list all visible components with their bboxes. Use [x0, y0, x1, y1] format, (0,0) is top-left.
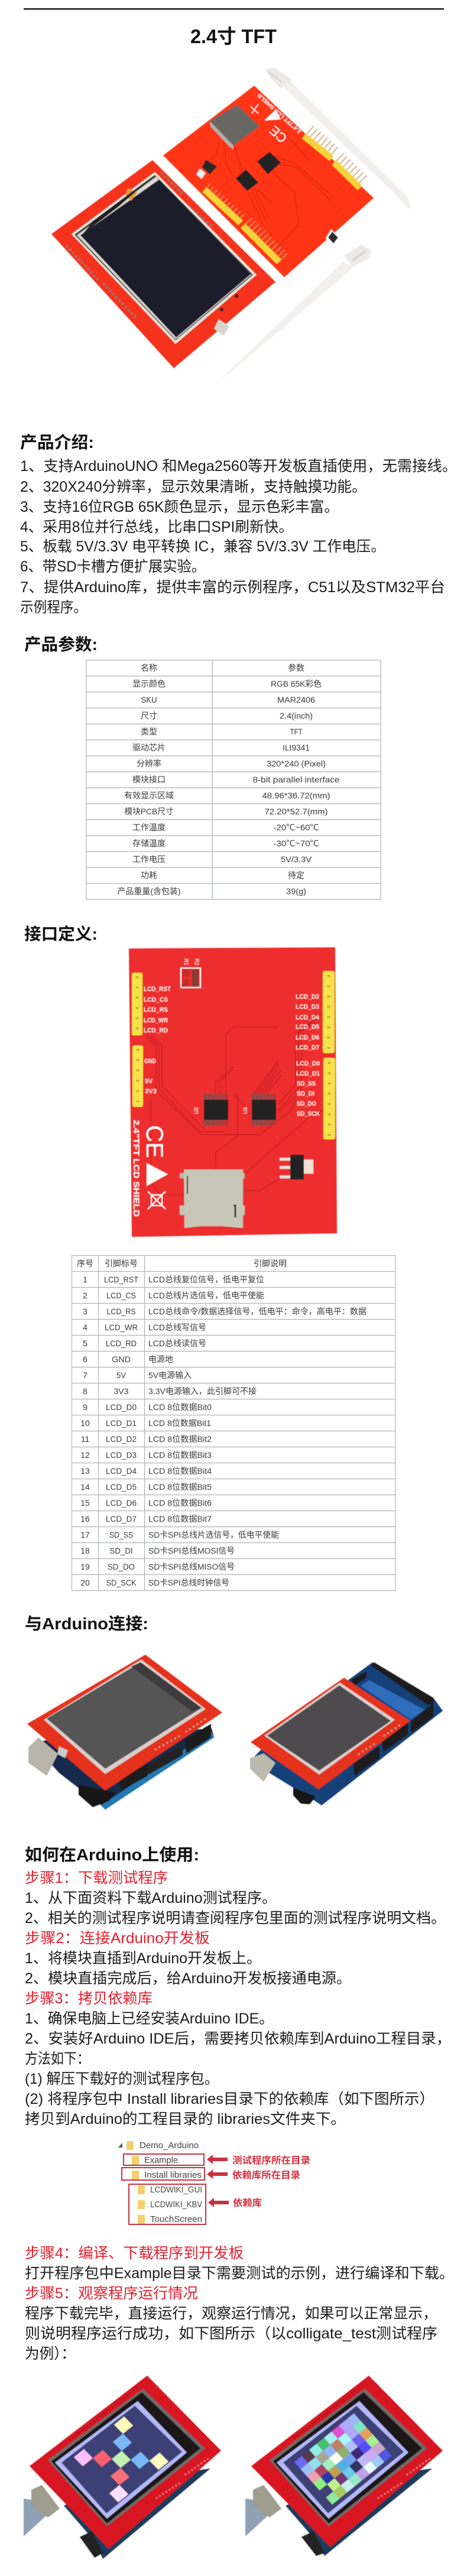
- product intro list: 2、320X240分辨率，显示效果清晰，支持触摸功能。: [20, 479, 367, 495]
- parameter table: 产品重量(含包装): [117, 886, 181, 896]
- pin table: 16: [80, 1514, 90, 1523]
- pin table: LCD 8位数据Bit0: [148, 1402, 212, 1412]
- power jack: [79, 1785, 115, 1807]
- parameter table: 8-bit parallel interface: [253, 775, 340, 784]
- steps 4 and 5: 步骤5：观察程序运行情况: [25, 2285, 198, 2302]
- pin header J3: [132, 973, 142, 1035]
- right pin labels: LCD_D3: [296, 1003, 319, 1011]
- usb cable: [245, 2499, 268, 2536]
- steps 1 to 3: 1、将模块直插到Arduino开发板上。: [25, 1950, 261, 1967]
- pin table: LCD_D6: [106, 1498, 137, 1508]
- pin table: LCD 8位数据Bit4: [148, 1466, 212, 1476]
- traces: [145, 1013, 324, 1195]
- pin header J1: [323, 1058, 335, 1139]
- folder names: Demo_Arduino: [140, 2140, 199, 2151]
- lavender screen edge: [277, 2401, 408, 2519]
- pin table: SD卡SPI总线MOSI信号: [148, 1546, 235, 1555]
- left pin labels: GND: [144, 1058, 156, 1065]
- pin solder dots: [137, 975, 329, 1139]
- pin table: LCD总线命令/数据选择信号，低电平：命令，高电平：数据: [148, 1307, 367, 1316]
- IC U2: [193, 1097, 228, 1123]
- parameter table: 48.96*36.72(mm): [262, 791, 330, 800]
- right pin labels: LCD_D1: [296, 1070, 320, 1077]
- edge holes: [294, 2386, 430, 2498]
- black top edge of panel: [131, 1662, 202, 1711]
- pin table: LCD 8位数据Bit2: [148, 1434, 212, 1444]
- frame: [48, 2389, 205, 2526]
- left pin labels: LCD_RST: [144, 986, 171, 993]
- pin table: 15: [80, 1498, 90, 1508]
- pin table: 1: [83, 1275, 87, 1284]
- black film strip: [83, 175, 155, 234]
- IC U3: U3: [242, 1107, 248, 1114]
- folder tree diagram: 依赖库: [233, 2197, 262, 2208]
- right pin labels: SD_DO: [297, 1100, 316, 1107]
- pin table: 8: [83, 1386, 87, 1396]
- pin table: LCD总线片选信号，低电平使能: [148, 1291, 264, 1300]
- regulator: [202, 160, 217, 174]
- pin table: SD_SS: [109, 1530, 133, 1539]
- pin table: LCD 8位数据Bit5: [148, 1482, 212, 1492]
- pin table: LCD_RST: [104, 1275, 138, 1284]
- pin table: 14: [80, 1482, 90, 1492]
- parameter table: 39(g): [286, 886, 306, 896]
- black panel: [51, 2392, 200, 2523]
- header holes: [67, 174, 213, 317]
- pin table: LCD总线读信号: [148, 1339, 206, 1348]
- bin mark: [251, 104, 258, 113]
- pin table: LCD 8位数据Bit7: [148, 1514, 212, 1523]
- right pin labels: LCD_D4: [296, 1014, 320, 1021]
- top rule: [24, 8, 444, 9]
- pin table: LCD_D4: [106, 1466, 137, 1476]
- arrows: [207, 2155, 229, 2207]
- resistors R1 R2: [181, 959, 200, 987]
- pin table: 5V电源输入: [148, 1370, 192, 1380]
- pin table: SD卡SPI总线时钟信号: [148, 1578, 229, 1587]
- pin table: 10: [80, 1418, 90, 1428]
- right pin labels: LCD_D6: [296, 1034, 319, 1041]
- folder tree diagram: LCDWIKI_KBV: [150, 2200, 202, 2210]
- steps 1 to 3: 步骤3：拷贝依赖库: [25, 1990, 153, 2007]
- screen: [61, 2406, 182, 2513]
- folder tree diagram: LCDWIKI_GUI: [150, 2185, 202, 2195]
- product intro list: [20, 458, 457, 616]
- left pin labels: LCD_RD: [144, 1027, 168, 1034]
- pin header J2: [323, 971, 335, 1053]
- screen: [47, 1662, 202, 1769]
- pin table: LCD 8位数据Bit6: [148, 1498, 212, 1508]
- pin table: 引脚标号: [105, 1259, 138, 1268]
- steps 1 to 3: (2) 将程序包中 Install libraries目录下的依赖库（如下图所示）: [25, 2091, 434, 2107]
- steps 1 to 3: 步骤1：下载测试程序: [25, 1870, 168, 1886]
- trace fans: [216, 1061, 281, 1093]
- SD card slot: [210, 105, 260, 145]
- product intro list: 4、采用8位并行总线，比串口SPI刷新快。: [20, 519, 293, 535]
- usb port: [250, 1753, 275, 1782]
- frame: [270, 2389, 427, 2526]
- pin table: LCD_RD: [106, 1339, 137, 1348]
- steps 1 to 3: 2、模块直插完成后，给Arduino开发板接通电源。: [25, 1970, 351, 1987]
- back board: [163, 86, 374, 277]
- folder tree diagram: TouchScreen: [150, 2214, 202, 2224]
- usb connector: [31, 2485, 60, 2517]
- highlight boxes: [122, 2154, 206, 2224]
- right pin labels: SD_DI: [297, 1090, 314, 1097]
- red shield: [251, 1678, 410, 1789]
- pin table: 3: [83, 1307, 87, 1316]
- navy pcb: [64, 2468, 210, 2559]
- parameter table: 工作电压: [132, 855, 166, 864]
- parameter table: MAR2406: [277, 695, 315, 704]
- pin table: LCD_D5: [106, 1482, 137, 1492]
- colored diamonds: [74, 2416, 168, 2502]
- left pin labels: 5V: [145, 1078, 153, 1085]
- edge holes: [73, 2386, 209, 2498]
- folder tree diagram: 依赖库所在目录: [232, 2169, 300, 2181]
- tact button: [214, 319, 229, 336]
- steps 1 to 3: 1、确保电脑上已经安装Arduino IDE。: [25, 2010, 274, 2027]
- pin table: SD_SCK: [106, 1578, 137, 1587]
- steps 1 to 3: 2、安装好Arduino IDE后，需要拷贝依赖库到Arduino工程目录，: [25, 2031, 451, 2047]
- hero photo: two shield boards and styluses: [51, 67, 411, 387]
- steps 1 to 3: [25, 1870, 451, 2127]
- stylus bottom: [212, 245, 371, 387]
- pin table: 18: [80, 1546, 90, 1555]
- pin table: 序号: [77, 1259, 93, 1268]
- screen: [283, 2406, 404, 2513]
- pin table: GND: [112, 1354, 131, 1364]
- photo: shield on Arduino Mega: [250, 1662, 443, 1805]
- right pin labels: LCD_D5: [296, 1024, 319, 1031]
- parameter table: ILI9341: [283, 743, 310, 752]
- lavender screen edge: [55, 2401, 187, 2519]
- product intro list: 5、板载 5V/3.3V 电平转换 IC，兼容 5V/3.3V 工作电压。: [20, 538, 385, 555]
- board back photo with pin labels: [129, 947, 337, 1237]
- heading: product intro: 产品介绍:: [20, 433, 94, 451]
- pin table: LCD总线写信号: [148, 1323, 206, 1332]
- folder rows: [118, 2141, 145, 2224]
- uno pcb: [33, 1729, 214, 1810]
- header holes: [155, 1717, 209, 1749]
- black headers: [371, 1662, 433, 1705]
- mini connector area: [118, 1764, 148, 1791]
- pin table: 11: [81, 1434, 89, 1444]
- button: [57, 1746, 68, 1758]
- pin table: LCD 8位数据Bit1: [148, 1418, 211, 1428]
- CE mark: CE: [267, 123, 290, 146]
- pin table: SD_DO: [108, 1562, 135, 1571]
- parameter table: 2.4(inch): [280, 711, 313, 720]
- black jack: [301, 2531, 325, 2556]
- pin table: 19: [80, 1562, 90, 1571]
- mega pcb: [250, 1662, 443, 1805]
- heading: how to use: 如何在Arduino上使用:: [25, 1846, 199, 1864]
- title: 2.4寸 TFT: [190, 25, 277, 47]
- stylus top: [265, 67, 411, 209]
- pin table: 2: [83, 1291, 87, 1300]
- pin table: SD卡SPI总线MISO信号: [148, 1562, 235, 1571]
- parameter table: RGB 65K彩色: [271, 679, 322, 688]
- photo: shield on Arduino UNO: [27, 1655, 222, 1810]
- parameter table: 72.20*52.7(mm): [265, 807, 327, 816]
- photo: test program result, dense pattern: [245, 2376, 443, 2556]
- left pin labels: LCD_RS: [144, 1006, 168, 1013]
- steps 1 to 3: (1) 解压下载好的测试程序包。: [25, 2071, 219, 2087]
- screen frame: [72, 172, 257, 344]
- right pin labels: LCD_D0: [296, 1060, 320, 1067]
- red shield: [251, 2376, 443, 2547]
- pin table: 引脚说明: [254, 1259, 287, 1268]
- front board: [51, 160, 275, 368]
- heading: parameters: 产品参数:: [24, 635, 98, 654]
- resistors R1 R2: R1: [183, 959, 189, 966]
- steps 4 and 5: 则说明程序运行成功，如下图所示（以colligate_test测试程序: [25, 2325, 437, 2342]
- ESD mark: [264, 110, 281, 121]
- pin table: 5V: [116, 1370, 127, 1380]
- steps 4 and 5: 打开程序包中Example目录下需要测试的示例，进行编译和下载。: [25, 2265, 454, 2282]
- parameter table: 参数: [288, 663, 304, 673]
- pin table: LCD_D7: [106, 1514, 137, 1523]
- resistors: [326, 229, 342, 247]
- parameter table: 有效显示区域: [124, 791, 174, 800]
- navy pcb: [286, 2468, 432, 2556]
- IC chip U2: [236, 170, 258, 191]
- steps 4 and 5: 步骤4：编译、下载程序到开发板: [25, 2245, 244, 2262]
- parameter table: 分辨率: [137, 759, 161, 768]
- pin table: [72, 1255, 395, 1591]
- heading: connect to Arduino: 与Arduino连接:: [25, 1615, 148, 1633]
- parameter table: 工作温度: [132, 823, 166, 832]
- pin headers: [205, 131, 364, 262]
- pin table: LCD_CS: [106, 1291, 136, 1300]
- arrow captions: 测试程序所在目录: [232, 2155, 310, 2166]
- silk: ESD mark: [147, 1163, 168, 1186]
- parameter table: TFT: [290, 727, 303, 736]
- silk: bin mark: [148, 1191, 166, 1209]
- parameter table: 320*240 (Pixel): [267, 759, 326, 768]
- folder tree diagram: [118, 2140, 310, 2224]
- steps 4 and 5: [25, 2245, 454, 2362]
- parameter table: 显示颜色: [132, 679, 166, 688]
- steps 1 to 3: 1、从下面资料下载Arduino测试程序。: [25, 1890, 277, 1906]
- parameter table: 驱动芯片: [132, 743, 166, 752]
- pin table: SD卡SPI总线片选信号，低电平使能: [148, 1530, 279, 1539]
- resistors R1 R2: R2: [194, 959, 200, 966]
- parameter table: 尺寸: [141, 711, 157, 720]
- black jack: [80, 2531, 103, 2558]
- left pin labels: [144, 986, 171, 1095]
- parameter table: [86, 660, 381, 899]
- parameter table: -20℃~60℃: [273, 823, 319, 832]
- parameter table: 存储温度: [132, 839, 166, 848]
- pin table: LCD_D3: [106, 1450, 137, 1460]
- pin table: 3V3: [113, 1386, 129, 1396]
- left pin labels: LCD_CS: [144, 996, 168, 1003]
- right pin labels: LCD_D2: [296, 993, 319, 1000]
- red shield: [30, 2376, 221, 2549]
- red shield: [27, 1655, 222, 1791]
- pin table: LCD_RS: [106, 1307, 136, 1316]
- parameter table: 模块PCB尺寸: [124, 807, 174, 816]
- screen frame: [264, 1682, 395, 1775]
- steps 4 and 5: 为例）：: [25, 2346, 76, 2362]
- right pin labels: SD_SS: [297, 1080, 316, 1087]
- usb cable: [24, 2499, 46, 2536]
- parameter table: 名称: [141, 663, 157, 673]
- pin table: 13: [80, 1466, 90, 1476]
- header holes: [359, 1724, 401, 1754]
- heading: pin definition: 接口定义:: [24, 925, 98, 943]
- pin table: 20: [80, 1578, 90, 1587]
- traces: [208, 133, 334, 247]
- IC chip U3: [257, 152, 281, 174]
- product intro list: 7、提供Arduino库，提供丰富的示例程序，C51以及STM32平台: [20, 579, 445, 596]
- photo: test program result, sparse pattern: [24, 2376, 221, 2559]
- regulator U1: [280, 1155, 313, 1180]
- product intro list: 1、支持ArduinoUNO 和Mega2560等开发板直插使用，无需接线。: [20, 458, 457, 475]
- SD card socket: [180, 1170, 245, 1228]
- pin table: SD_DI: [110, 1546, 132, 1555]
- parameter table: 模块接口: [132, 775, 166, 784]
- pcb: [129, 947, 337, 1237]
- folder tree diagram: Install libraries: [144, 2170, 202, 2180]
- pin table: LCD_D2: [106, 1434, 137, 1444]
- pin table: 17: [80, 1530, 90, 1539]
- IC U2: U2: [193, 1107, 199, 1114]
- pin table: 9: [83, 1402, 87, 1412]
- silk: model name: 2.4"TFT LCD SHIELD: [132, 1120, 141, 1217]
- pin table: 4: [83, 1323, 87, 1332]
- product intro list: 6、带SD卡槽方便扩展实验。: [20, 558, 206, 575]
- black panel: [273, 2392, 422, 2523]
- steps 1 to 3: 方法如下：: [25, 2051, 90, 2067]
- screen frame: [44, 1659, 206, 1774]
- parameter table: SKU: [141, 695, 157, 704]
- power jack: [293, 1788, 316, 1804]
- steps 4 and 5: 程序下载完毕，直接运行，观察运行情况，如果可以正常显示，: [25, 2305, 437, 2322]
- pin table: LCD 8位数据Bit3: [148, 1450, 212, 1460]
- pin header J4: [132, 1045, 143, 1107]
- colored tile grid: [294, 2413, 392, 2504]
- folder tree diagram: Example: [144, 2155, 178, 2165]
- product intro list: 示例程序。: [20, 599, 87, 616]
- steps 1 to 3: 步骤2：连接Arduino开发板: [25, 1930, 210, 1947]
- pin table: 3.3V电源输入，此引脚可不接: [148, 1386, 257, 1396]
- pin table: LCD_D0: [106, 1402, 137, 1412]
- screen: [267, 1685, 391, 1771]
- pin table: LCD_D1: [106, 1418, 137, 1428]
- screen: [80, 180, 251, 337]
- IC U3: [242, 1097, 276, 1123]
- parameter table: 5V/3.3V: [281, 855, 312, 864]
- product intro list: 3、支持16位RGB 65K颜色显示，显示色彩丰富。: [20, 499, 339, 515]
- pin table: LCD_WR: [105, 1323, 138, 1332]
- usb port: [28, 1737, 58, 1776]
- silk text: 2.4"TFT LCD SHIELD: [256, 92, 302, 135]
- pin table: 电源地: [148, 1354, 173, 1364]
- black headers: [185, 1724, 211, 1753]
- left pin labels: 3V3: [145, 1088, 157, 1095]
- parameter table: 待定: [288, 870, 304, 880]
- left pin labels: LCD_WR: [144, 1017, 168, 1024]
- pin table: 7: [83, 1370, 87, 1380]
- usb connector: [253, 2485, 281, 2517]
- steps 1 to 3: 拷贝到Arduino的工程目录的 libraries文件夹下。: [25, 2111, 346, 2127]
- steps 1 to 3: 2、相关的测试程序说明请查阅程序包里面的测试程序说明文档。: [25, 1910, 446, 1927]
- parameter table: 类型: [141, 727, 157, 736]
- ribbon: [125, 188, 137, 201]
- parameter table: -30℃~70℃: [273, 839, 319, 848]
- right pin labels: [296, 993, 320, 1118]
- pin table: LCD总线复位信号，低电平复位: [148, 1275, 264, 1284]
- parameter table: 功耗: [141, 870, 157, 880]
- silk: CE mark: CE: [141, 1125, 167, 1158]
- pin table: 6: [83, 1354, 87, 1364]
- right pin labels: SD_SCK: [297, 1110, 320, 1118]
- pin table: 5: [83, 1339, 87, 1348]
- pin table: 12: [80, 1450, 90, 1460]
- right pin labels: LCD_D7: [296, 1044, 319, 1051]
